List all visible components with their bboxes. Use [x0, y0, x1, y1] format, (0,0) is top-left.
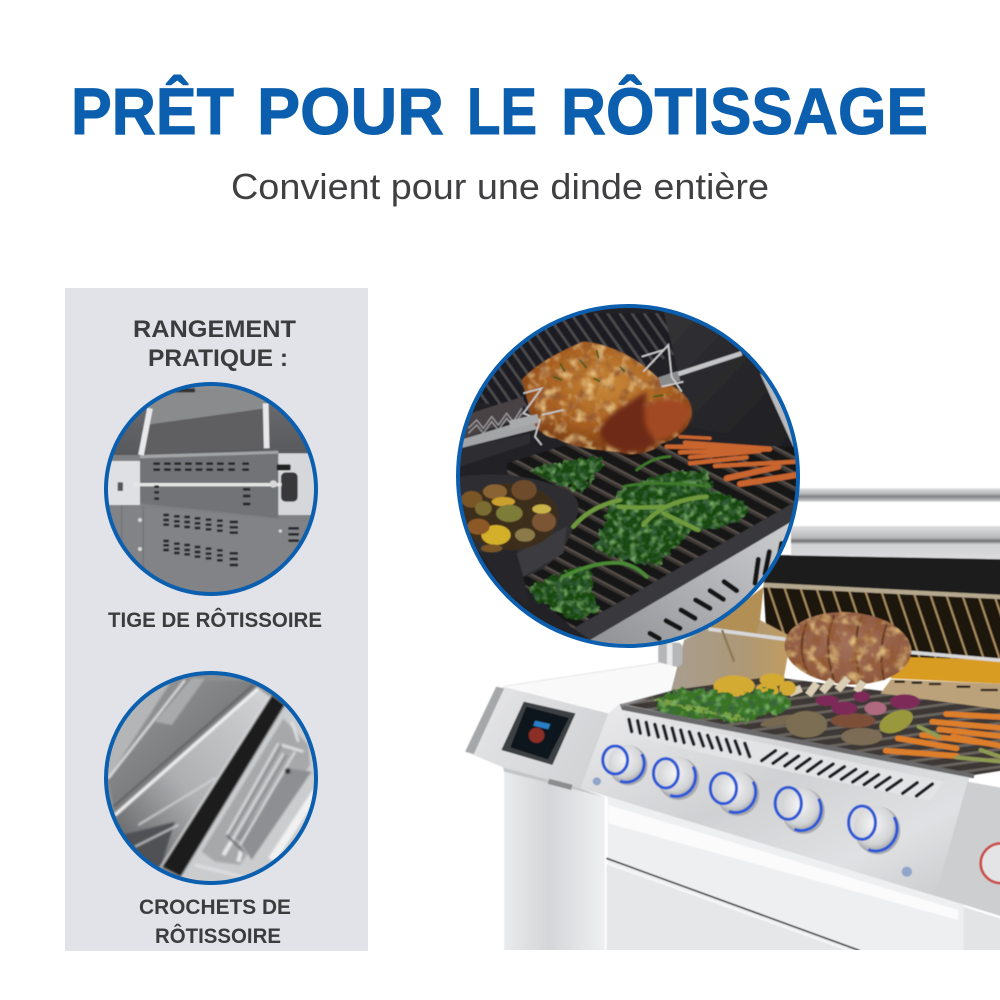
right door	[936, 782, 1000, 917]
yellow burner	[891, 657, 1000, 684]
hood silver edge	[760, 373, 794, 448]
vent plate	[702, 736, 924, 793]
grate	[507, 442, 798, 628]
photo: rotisserie rod	[104, 382, 318, 596]
panel: storage	[65, 288, 368, 951]
title: PRÊT	[71, 74, 234, 148]
food: eggplant	[760, 710, 914, 746]
vent slots	[629, 719, 750, 757]
title: RÔTISSAGE	[561, 74, 928, 148]
hood side	[670, 587, 791, 693]
title: POUR	[257, 74, 444, 148]
potatoes	[461, 480, 558, 552]
panel heading: PRATIQUE :	[148, 345, 288, 372]
back wall	[470, 313, 683, 413]
fascia	[581, 703, 970, 897]
greens	[530, 457, 750, 620]
panel heading: RANGEMENT	[133, 316, 296, 343]
callout: rotisserie close-up	[450, 300, 810, 650]
hood edge	[791, 526, 1000, 559]
slots	[650, 543, 782, 639]
chicken	[522, 342, 692, 454]
side panel	[465, 687, 608, 788]
spit forks and rod	[510, 345, 742, 445]
hood interior black	[763, 555, 1000, 597]
label: hooks	[139, 896, 291, 948]
title: LE	[467, 74, 537, 148]
food: onions	[815, 691, 920, 715]
food: carrots	[886, 714, 1000, 762]
left cabinet	[504, 767, 605, 955]
gas knobs	[603, 745, 900, 854]
screws	[593, 777, 601, 785]
label: hooks: CROCHETS DE	[139, 896, 291, 919]
doors	[608, 797, 963, 955]
panel heading	[133, 316, 296, 372]
lip	[573, 500, 802, 640]
grate surface	[622, 677, 1000, 775]
stems	[563, 457, 710, 577]
silver panel	[590, 522, 790, 644]
photo: grill	[465, 488, 1000, 955]
hood handle	[791, 488, 1000, 502]
subtitle: Convient pour une dinde entière	[231, 166, 769, 207]
rail with pattern	[460, 397, 523, 440]
roast	[782, 608, 914, 689]
rotisserie rod	[708, 629, 1000, 661]
hood back grate	[763, 587, 1000, 670]
ribs	[789, 678, 863, 695]
display	[501, 702, 576, 765]
carrots	[667, 437, 797, 484]
hood side	[664, 312, 730, 423]
label: hooks: RÔTISSOIRE	[155, 924, 281, 948]
photo: rotisserie hooks	[104, 671, 318, 885]
shelf	[505, 663, 676, 713]
grill lip	[620, 704, 974, 778]
rod left	[462, 423, 538, 448]
title	[71, 74, 928, 148]
skillet	[460, 474, 579, 607]
label: rod: TIGE DE RÔTISSOIRE	[108, 608, 322, 632]
food: potatoes	[713, 673, 796, 699]
food: broccoli	[653, 689, 791, 722]
